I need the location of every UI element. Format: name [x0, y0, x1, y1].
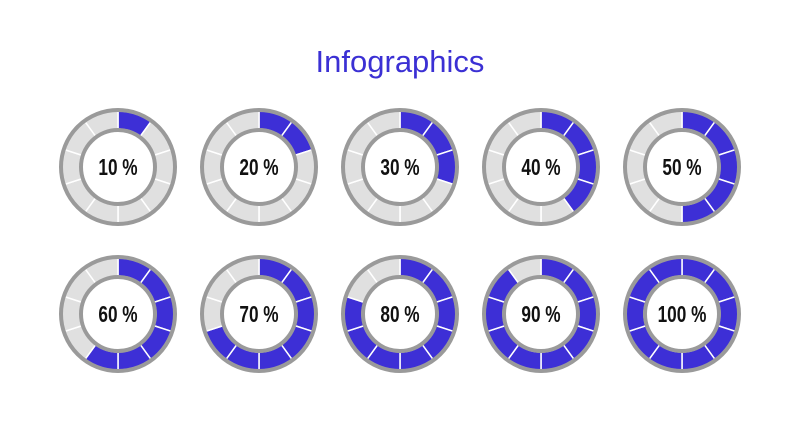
chart: 60% [61, 257, 175, 371]
chart: 50% [625, 110, 739, 224]
chart: 80% [343, 257, 457, 371]
chart: 100% [625, 257, 739, 371]
chart: 20% [202, 110, 316, 224]
chart: 20%: 20 % [239, 156, 279, 181]
chart: 70% [202, 257, 316, 371]
chart: 90% [484, 257, 598, 371]
chart: 80%: 80 % [380, 303, 420, 328]
chart: 10%: 10 % [98, 156, 138, 181]
title: Infographics [316, 44, 484, 79]
chart: 100%: 100 % [658, 303, 706, 328]
chart: 70%: 70 % [239, 303, 279, 328]
chart: 40% [484, 110, 598, 224]
chart: 60%: 60 % [98, 303, 138, 328]
chart: 40%: 40 % [521, 156, 561, 181]
chart: 90%: 90 % [521, 303, 561, 328]
chart: 30% [343, 110, 457, 224]
chart: 30%: 30 % [380, 156, 420, 181]
chart: 50%: 50 % [662, 156, 702, 181]
chart: 10% [61, 110, 175, 224]
